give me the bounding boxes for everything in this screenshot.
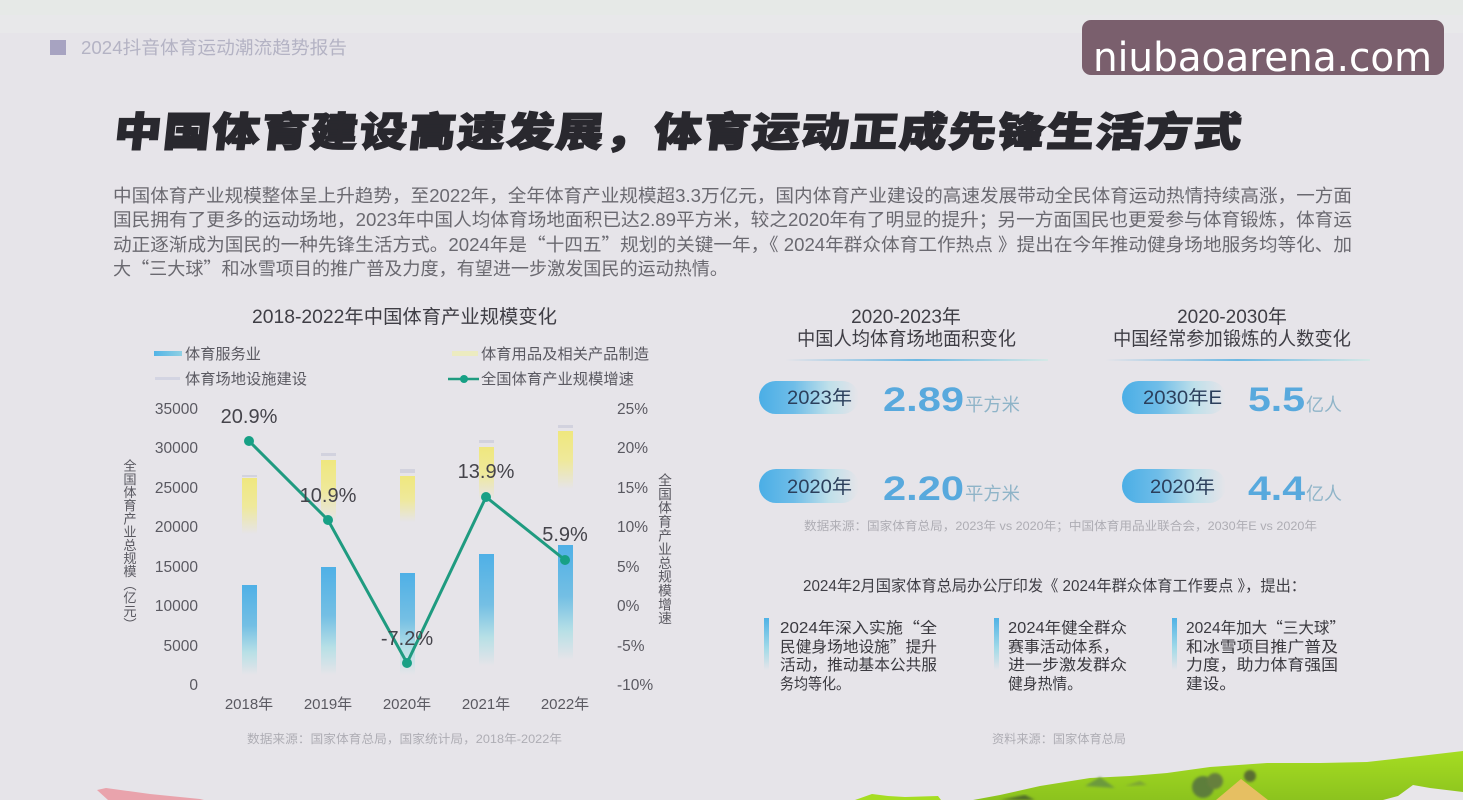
- left axis labels: 25000: [155, 480, 198, 497]
- right axis labels: 15%: [617, 480, 648, 497]
- left axis title: 全国体育产业总规模（亿元）: [120, 458, 140, 631]
- policy item 3: 力度，助力体育强国: [1186, 656, 1338, 674]
- right axis labels: 10%: [617, 519, 648, 536]
- x axis labels: 2021年: [462, 696, 510, 713]
- policy item 1: 民健身场地设施”提升: [780, 635, 937, 657]
- left axis labels: 35000: [155, 401, 198, 418]
- policy item 3: [1172, 616, 1345, 693]
- stat: 2020: 亿人: [1306, 484, 1342, 504]
- policy item 2: 2024年健全群众: [1008, 619, 1127, 637]
- policy item 1: 务均等化。: [780, 675, 850, 693]
- intro paragraph: 动正逐渐成为国民的一种先锋生活方式。2024年是 “十四五”规划的关键一年，《 2024年群众体育工作热点 》提出在今年推动健身场地服务均等化、加: [113, 231, 1352, 257]
- left axis labels: 0: [189, 677, 198, 694]
- stat: 2020: 2020年: [1150, 476, 1215, 498]
- left axis labels: 15000: [155, 559, 198, 576]
- stat: 2030E: 亿人: [1306, 395, 1342, 415]
- stat: 2030E: [1122, 381, 1342, 419]
- panel: industry size chart: [120, 306, 675, 746]
- policy item 3: 建设。: [1186, 675, 1236, 693]
- stat: 2020: 平方米: [965, 484, 1020, 504]
- stat: 2020: 4.4: [1248, 470, 1305, 508]
- stat: 2023: 2.89: [883, 381, 964, 419]
- right axis labels: 20%: [617, 440, 648, 457]
- policy item 2: 健身热情。: [1008, 675, 1082, 693]
- intro paragraph: 大“三大球”和冰雪项目的推广普及力度，有望进一步激发国民的运动热情。: [113, 255, 728, 281]
- x axis labels: [225, 696, 589, 713]
- x axis labels: 2019年: [304, 696, 352, 713]
- stat: 2023: [759, 381, 1020, 419]
- x axis labels: 2018年: [225, 696, 273, 713]
- left axis labels: 30000: [155, 440, 198, 457]
- legend: 全国体育产业规模增速: [481, 370, 634, 388]
- chart title: 2018-2022年中国体育产业规模变化: [252, 306, 557, 328]
- stat: 2023: 2023年: [787, 387, 852, 409]
- stat: 2030E: 5.5: [1248, 381, 1305, 419]
- title: 中国体育建设高速发展，体育运动正成先锋生活方式: [112, 99, 1245, 158]
- stat: 2020: 2020年: [787, 476, 852, 498]
- pink decoration: [97, 788, 204, 800]
- legend: 体育用品及相关产品制造: [481, 346, 649, 363]
- policy item 1: 活动，推动基本公共服: [780, 656, 937, 674]
- heading: 中国经常参加锻炼的人数变化: [1113, 328, 1351, 350]
- intro paragraph: 国民拥有了更多的运动场地，2023年中国人均体育场地面积已达2.89平方米，较之2020年有了明显的提升；另一方面国民也更爱参与体育锻炼，体育运: [113, 210, 1352, 230]
- growth data labels: 20.9%: [221, 406, 278, 428]
- stat: 2023: 平方米: [965, 395, 1020, 415]
- policy item 3: 2024年加大“三大球”: [1186, 616, 1345, 638]
- policy item 3: 和冰雪项目推广普及: [1186, 638, 1338, 656]
- stacked bars: [242, 425, 573, 675]
- stat: 2030E: 2030年E: [1143, 387, 1222, 409]
- growth data labels: 10.9%: [300, 485, 357, 507]
- watermark: niubaoarena.com: [1093, 35, 1432, 81]
- stat: 2020: [759, 469, 1020, 508]
- intro paragraph: 中国体育产业规模整体呈上升趋势，至2022年，全年体育产业规模超3.3万亿元，国内体育产业建设的高速发展带动全民体育运动热情持续高涨，一方面: [113, 186, 1352, 206]
- stats source: 数据来源：国家体育总局，2023年 vs 2020年；中国体育用品业联合会，2030年E vs 2020年: [804, 518, 1317, 533]
- panel: venue area per capita: [759, 306, 1048, 508]
- right axis title: 全国体育产业总规模增速: [655, 472, 675, 626]
- left axis labels: 20000: [155, 519, 198, 536]
- panel: regular exercisers: [1105, 306, 1370, 508]
- right axis labels: -10%: [617, 677, 653, 694]
- right axis labels: 5%: [617, 559, 640, 576]
- stat: 2020: [1122, 469, 1342, 508]
- legend: [154, 346, 649, 388]
- right axis labels: [617, 401, 653, 694]
- x axis labels: 2022年: [541, 696, 589, 713]
- heading: [1113, 306, 1351, 350]
- left axis labels: 5000: [164, 638, 198, 655]
- policy item 1: [764, 616, 938, 693]
- policy item 2: [994, 618, 1127, 693]
- right axis labels: 0%: [617, 598, 640, 615]
- right axis labels: -5%: [617, 638, 645, 655]
- policy source: 资料来源：国家体育总局: [992, 731, 1126, 746]
- chart source: 数据来源：国家体育总局，国家统计局，2018年-2022年: [247, 731, 562, 746]
- x axis labels: 2020年: [383, 696, 431, 713]
- icon: tent: [1216, 779, 1268, 800]
- landscape: grass hill: [855, 751, 1463, 800]
- growth line: [244, 436, 570, 668]
- policy item 2: 进一步激发群众: [1008, 656, 1127, 674]
- legend: 体育场地设施建设: [185, 371, 307, 388]
- heading: [797, 306, 1016, 350]
- growth data labels: [221, 406, 588, 650]
- growth data labels: 13.9%: [458, 461, 515, 483]
- heading: 中国人均体育场地面积变化: [797, 328, 1016, 350]
- left axis labels: [155, 401, 198, 694]
- growth data labels: 5.9%: [542, 524, 588, 546]
- policy item 2: 赛事活动体系，: [1008, 637, 1119, 656]
- intro paragraph: [113, 186, 1352, 281]
- stat: 2020: 2.20: [883, 470, 964, 508]
- legend: 体育服务业: [185, 346, 261, 363]
- report header: 2024抖音体育运动潮流趋势报告: [81, 38, 347, 58]
- policy item 1: 2024年深入实施 “全: [780, 616, 938, 638]
- left axis labels: 10000: [155, 598, 198, 615]
- growth data labels: -7.2%: [381, 628, 433, 650]
- heading: 2020-2030年: [1177, 306, 1287, 328]
- heading: 2020-2023年: [851, 306, 961, 328]
- policy heading: 2024年2月国家体育总局办公厅印发《 2024年群众体育工作要点 》，提出：: [803, 577, 1306, 595]
- right axis labels: 25%: [617, 401, 648, 418]
